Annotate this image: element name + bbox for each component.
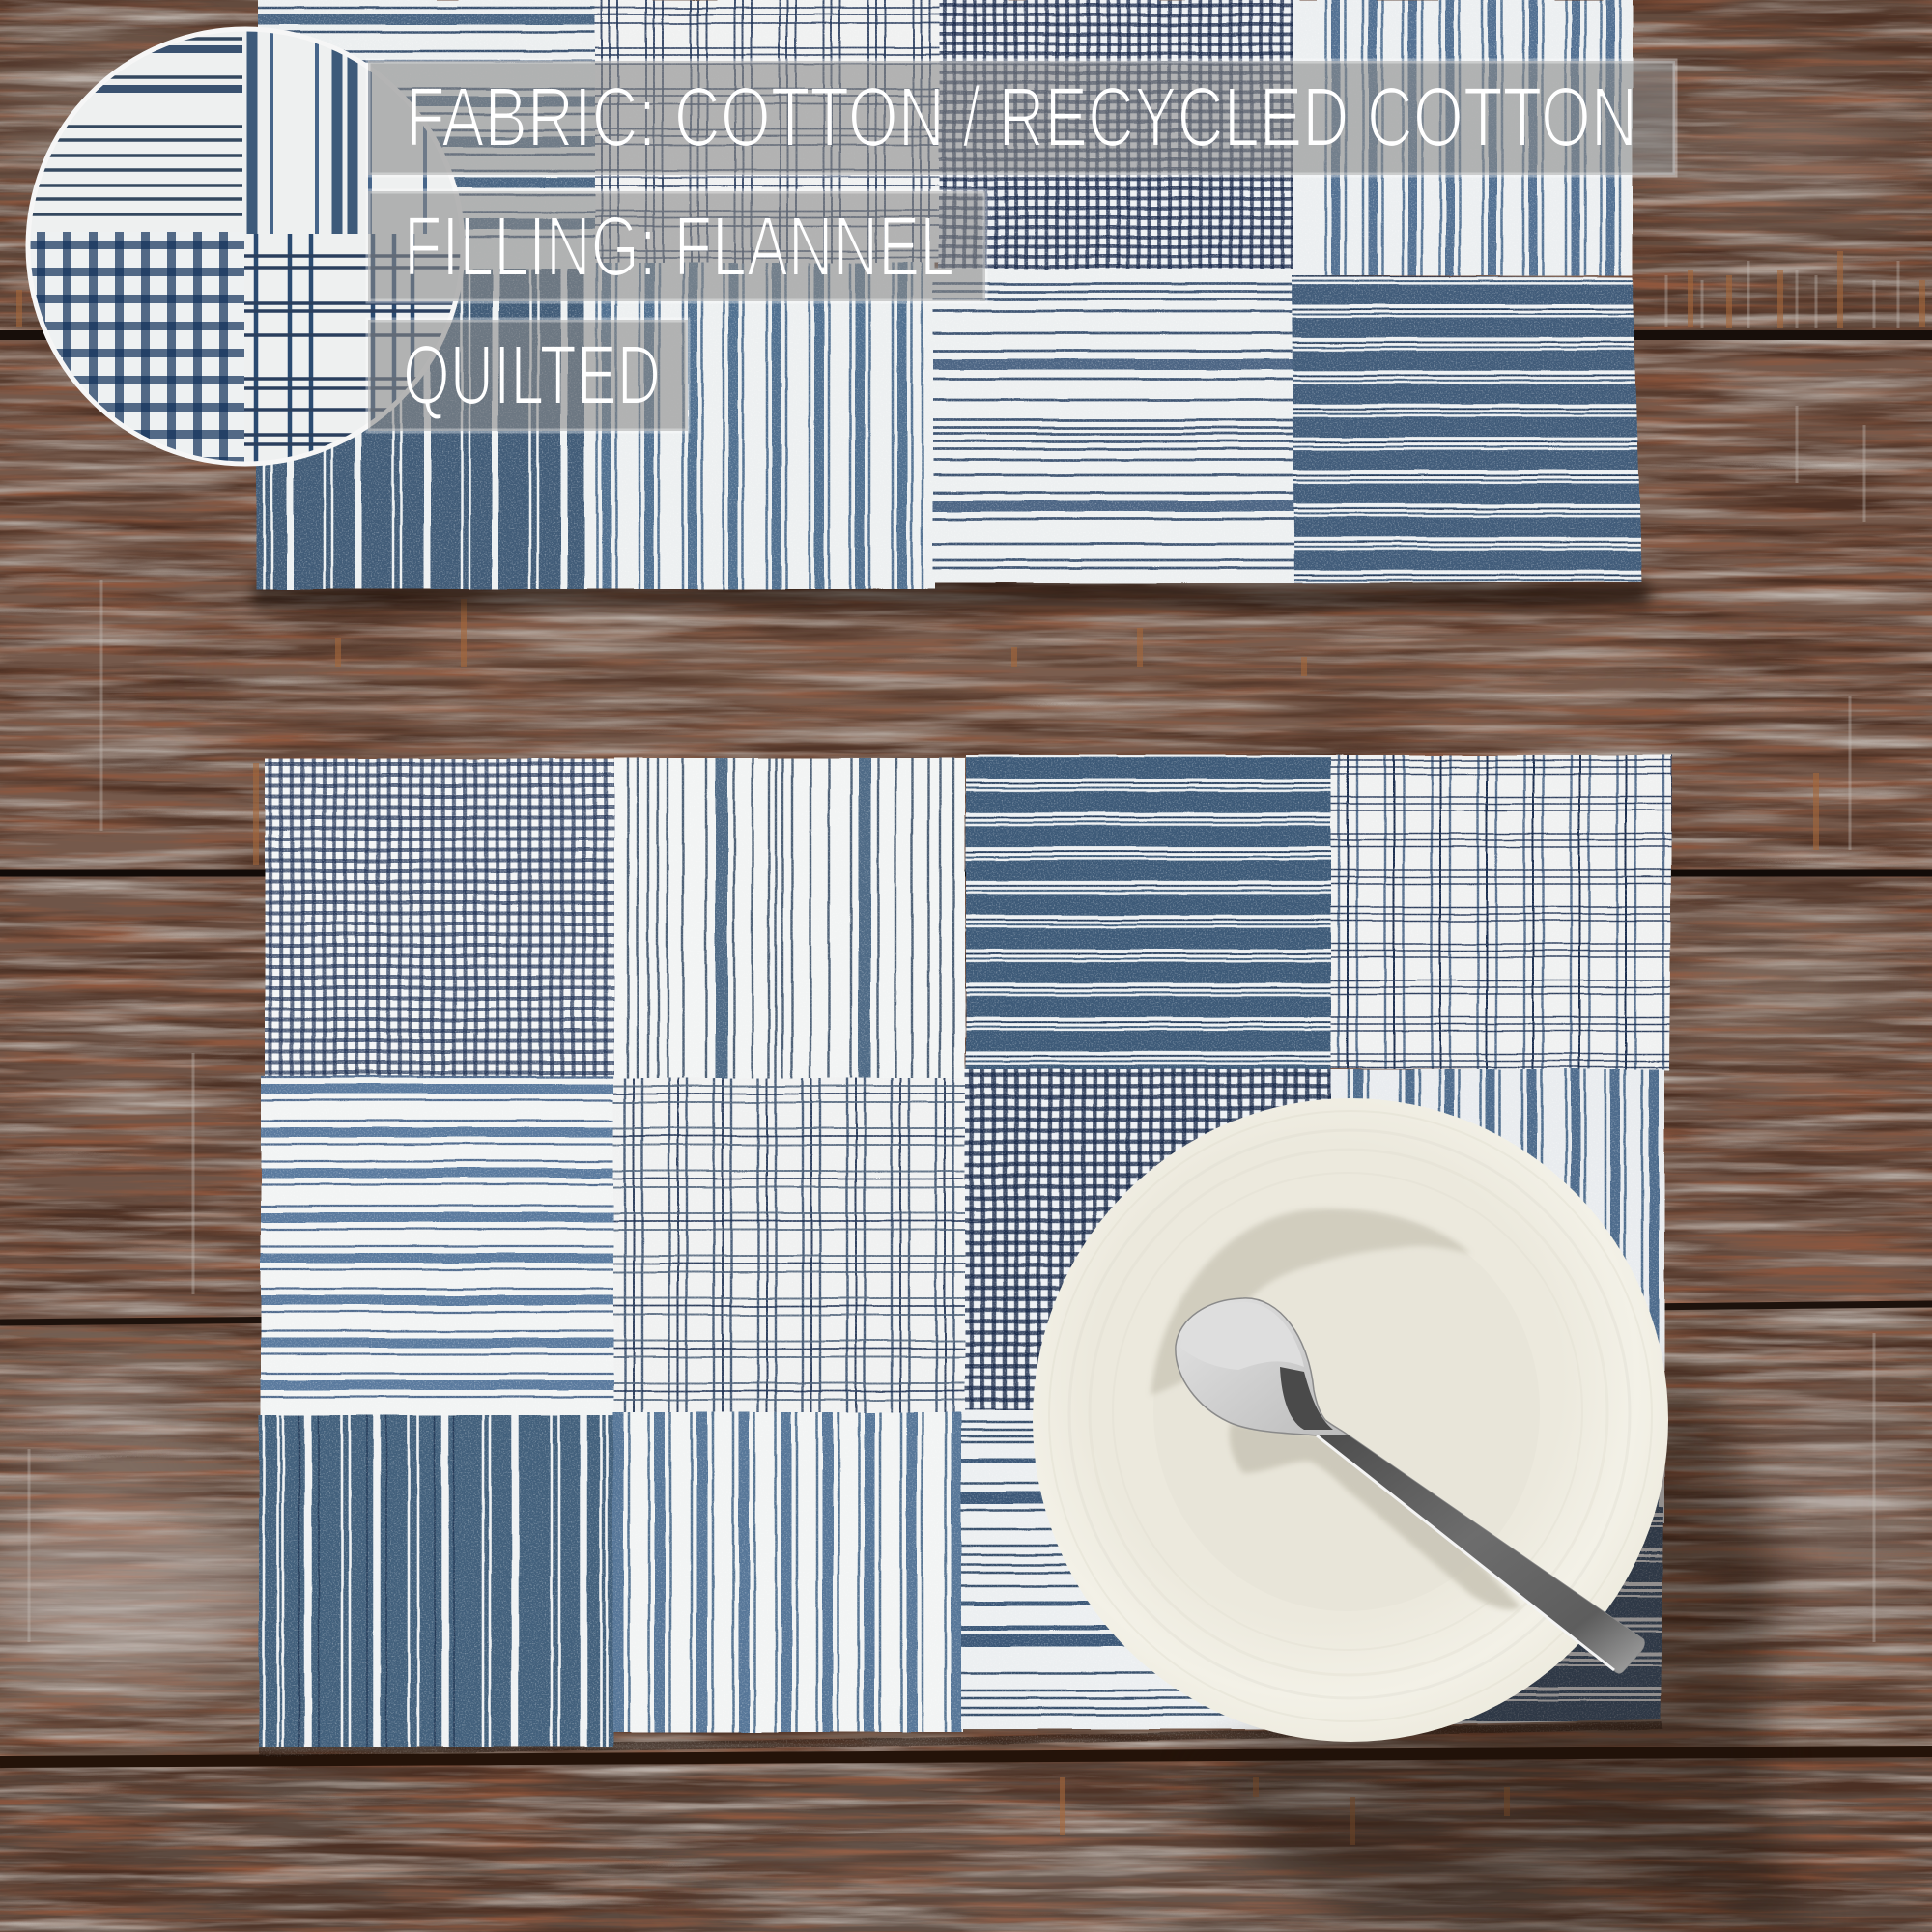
patch: dark horizontal stripes row 3: [1331, 1507, 1663, 1727]
shadow: top placemat: [253, 580, 1649, 609]
patch: dark horizontal stripes row 1: [966, 755, 1331, 1070]
patch: plaid row 2: [613, 1078, 965, 1412]
plate well: [1153, 1209, 1540, 1611]
patch: gingham row 1: [265, 759, 614, 1078]
close-up: vertical stripes: [247, 31, 427, 234]
close-up: horizontal stripes: [33, 37, 242, 216]
patch: white vertical stripes: [584, 263, 935, 589]
patch: gingham row 2: [965, 1069, 1332, 1412]
patch: vertical stripes row 2: [1331, 1069, 1664, 1523]
placemat: top patchwork: [256, 0, 1642, 589]
magnifier: fabric close-up circle: [28, 29, 465, 466]
shadow: plate cast on table: [1194, 1368, 1810, 1932]
patch: white vertical stripes row 3: [613, 1412, 963, 1732]
close-up: bold gingham: [28, 232, 244, 464]
patch: vertical stripes top right: [1293, 0, 1633, 275]
patch: horizontal stripes top left: [258, 0, 595, 270]
shadow: spoon on plate: [1230, 1423, 1520, 1609]
patch: gingham top: [939, 0, 1294, 270]
patch: horizontal stripes row 2: [261, 1077, 613, 1415]
spoon: [1176, 1298, 1644, 1673]
callout: fabric label: [368, 61, 1675, 175]
callout: filling label: [368, 191, 985, 301]
patch: dark vertical stripes bottom left: [256, 269, 586, 589]
plate: [1033, 1098, 1668, 1742]
patch: white horizontal stripes row 3: [961, 1410, 1333, 1729]
callout: filling label: FILLING: FLANNEL: [404, 200, 954, 294]
shadow: plate rim on well: [1151, 1208, 1471, 1395]
patch: dark vertical stripes row 3: [259, 1415, 613, 1747]
patch: plaid row 1: [1331, 755, 1672, 1070]
patch: white horizontal stripes: [933, 269, 1294, 583]
callout: quilted label: [368, 320, 688, 431]
shadow edge: main mat: [259, 1721, 1663, 1756]
patch: dark horizontal stripes: [1292, 275, 1642, 583]
patch: vertical stripes row 1: [614, 758, 965, 1078]
callout: quilted label: QUILTED: [403, 328, 661, 422]
patch: plaid top: [595, 0, 939, 263]
placemat: main patchwork: [259, 755, 1672, 1756]
close-up: plaid: [244, 234, 465, 466]
